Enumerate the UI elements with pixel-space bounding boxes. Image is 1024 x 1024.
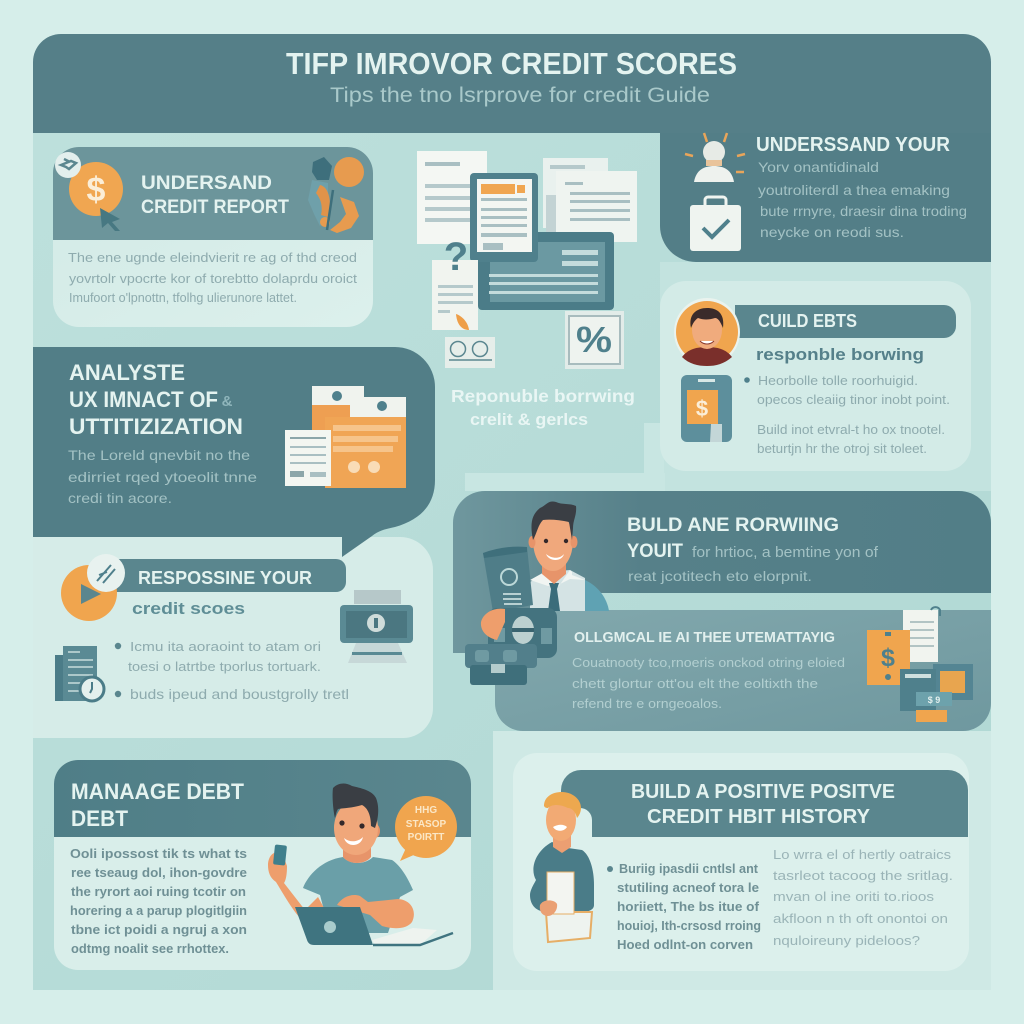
text block: credi tin acore.	[68, 490, 172, 506]
caption: crelit & gerlcs	[470, 410, 588, 429]
illustration: man with phone and device	[465, 502, 609, 685]
icon: paper stack	[417, 151, 637, 244]
text block: edirriet rqed ytoeolit tnne	[68, 469, 257, 485]
text block: left: Hoed odlnt-on corven	[617, 938, 753, 952]
icon: orange documents	[285, 386, 406, 488]
heading: ANALYSTE	[69, 360, 185, 385]
text block: right: tasrleot tacoog the sritlag.	[773, 868, 953, 883]
icon: orange play disc	[61, 554, 125, 621]
icon: money folder and cards: $ 9	[928, 695, 940, 705]
panel: responsible credit scores	[33, 537, 433, 738]
heading pill	[115, 559, 346, 592]
heading: BUILD A POSITIVE POSITVE	[631, 781, 895, 803]
heading: UTTITIZIZATION	[69, 414, 243, 439]
heading and text: reat jcotitech eto elorpnit.	[628, 568, 812, 584]
heading and text: YOUIT	[627, 541, 683, 562]
heading and text	[627, 515, 879, 584]
heading and text: BULD ANE RORWIING	[627, 515, 839, 536]
callout: speech bubble: HHG	[415, 805, 437, 816]
text block: left: horiiett, The bs itue of	[617, 900, 760, 914]
text block	[758, 159, 967, 240]
text block: toesi o latrtbe tporlus tortuark.	[128, 659, 321, 674]
icon: monitor	[478, 232, 614, 310]
icon: tablet	[470, 173, 538, 262]
panel: manage debt	[54, 760, 471, 970]
subtitle: Tips the tno lsrprove for credit Guide	[330, 84, 710, 107]
text block: Heorbolle tolle roorhuigid.	[758, 374, 918, 388]
icon: bag with check	[690, 197, 741, 251]
callout: speech bubble: STASOP	[406, 819, 447, 830]
text block: right	[773, 847, 953, 948]
heading: &	[222, 393, 233, 410]
heading	[69, 360, 243, 439]
text block	[572, 655, 845, 711]
text block: left: houioj, Ith-crsosd rroing	[617, 919, 761, 933]
text block: horering a a parup plogitlgiin	[70, 904, 247, 918]
icon: note with question mark: ?	[444, 235, 468, 279]
text block	[68, 447, 257, 506]
caption	[451, 386, 635, 429]
text block: right: mvan ol ine oriti to.rioos	[773, 889, 935, 904]
icon: money folder and cards: $	[881, 644, 895, 672]
text block: Ooli ipossost tik ts what ts	[70, 847, 247, 861]
heading: MANAAGE DEBT	[71, 779, 245, 804]
icon: money folder and cards	[867, 607, 973, 722]
panel: build a borrowing	[453, 491, 991, 731]
icon: printer laptop	[340, 590, 413, 663]
text block: left: Buriig ipasdii cntlsl ant	[619, 862, 759, 876]
panel: build a positive credit history	[513, 753, 969, 971]
text block: yovrtolr vpocrte kor of torebtto dolaprdu oroict	[69, 272, 358, 286]
heading	[631, 781, 895, 828]
text block: bute rrnyre, draesir dina troding	[760, 203, 967, 219]
text block: Icmu ita aoraoint to atam ori	[130, 639, 321, 654]
heading: UX IMNACT OF	[69, 387, 218, 412]
heading: TIFP IMROVOR CREDIT SCORES	[286, 46, 737, 81]
subheading: responble borwing	[756, 345, 924, 364]
text block: left: stutiling acneof tora le	[617, 881, 759, 895]
text block: odtmg noalit see rrhottex.	[71, 942, 229, 956]
icon: document with clock	[55, 646, 104, 701]
caption: Reponuble borrwing	[451, 386, 635, 406]
heading: DEBT	[71, 806, 129, 831]
icon: phone with dollar: $	[696, 396, 708, 421]
icon: percent box: %	[576, 319, 612, 360]
heading: CREDIT HBIT HISTORY	[647, 806, 871, 828]
text block: left	[607, 862, 761, 952]
heading	[71, 779, 245, 831]
callout: speech bubble: POIRTT	[408, 832, 444, 843]
heading: CREDIT REPORT	[141, 197, 289, 218]
illustration: person with book	[530, 792, 594, 942]
text block: opecos cleaiig tinor inobt point.	[757, 393, 950, 407]
heading and text: for hrtioc, a bemtine yon of	[692, 544, 879, 561]
heading pill: RESPOSSINE YOUR	[138, 568, 312, 588]
callout: speech bubble	[395, 796, 457, 861]
text block: buds ipeud and boustgrolly tretl	[130, 686, 349, 702]
text block: the ryrort aoi ruing tcotir on	[71, 885, 246, 899]
icon: dollar coin with cursor	[55, 152, 123, 231]
text block: The Loreld qnevbit no the	[68, 447, 250, 463]
heading pill: CUILD EBTS	[758, 311, 857, 331]
panel: center document illustration	[417, 151, 637, 429]
text block: chett glortur ott'ou elt the eoltixth the	[572, 676, 818, 691]
text block: Couatnooty tco,rnoeris onckod otring eloied	[572, 655, 845, 670]
icon: dollar coin with cursor: $	[87, 171, 106, 209]
text block: Build inot etvral-t ho ox tnootel.	[757, 423, 945, 437]
text block: neycke on reodi sus.	[760, 224, 904, 240]
icon: portrait	[674, 298, 740, 366]
icon: percent box	[565, 311, 624, 369]
text block	[68, 251, 358, 305]
title banner	[33, 34, 991, 133]
panel: understand credit report	[53, 147, 373, 327]
text block	[115, 639, 349, 702]
heading: UNDERSAND	[141, 173, 272, 194]
icon: person with rays	[685, 133, 745, 182]
heading	[141, 173, 289, 218]
heading pill	[735, 305, 956, 338]
text block: Imufoort o'lpnottn, tfolhg ulierunore lattet.	[69, 291, 297, 305]
text block: refend tre e orngeoalos.	[572, 696, 722, 711]
panel: understand your	[660, 133, 991, 262]
text block: The ene ugnde eleindvierit re ag of thd creod	[68, 251, 357, 265]
text block	[744, 374, 950, 456]
text block: ree tseaug dol, ihon-govdre	[71, 866, 247, 880]
icon: phone with dollar	[681, 375, 732, 442]
icon: small glasses card	[445, 337, 495, 368]
text block: right: akfloon n th oft onontoi on	[773, 911, 948, 926]
text block	[70, 847, 247, 956]
text block: youtroliterdl a thea emaking	[758, 182, 950, 198]
panel: analyse utilization	[33, 347, 435, 557]
icon: note with question mark	[432, 235, 478, 330]
panel: build responsible borrowing	[660, 281, 971, 471]
heading: UNDERSSAND YOUR	[756, 134, 951, 156]
text block: right: Lo wrra el of hertly oatraics	[773, 847, 952, 862]
text block: beturtjn hr the otroj sit toleet.	[757, 442, 927, 456]
lower panel: obligation	[495, 607, 991, 731]
icon: abstract figures	[308, 157, 364, 233]
text block: tbne ict poidi a ngruj a xon	[71, 923, 247, 937]
text block: Yorv onantidinald	[758, 159, 879, 175]
subheading: credit scoes	[132, 599, 245, 618]
text block: right: nquloireuny pideloos?	[773, 933, 920, 948]
illustration: man with laptop	[268, 784, 453, 946]
heading: OLLGMCAL IE AI THEE UTEMATTAYIG	[574, 629, 835, 646]
